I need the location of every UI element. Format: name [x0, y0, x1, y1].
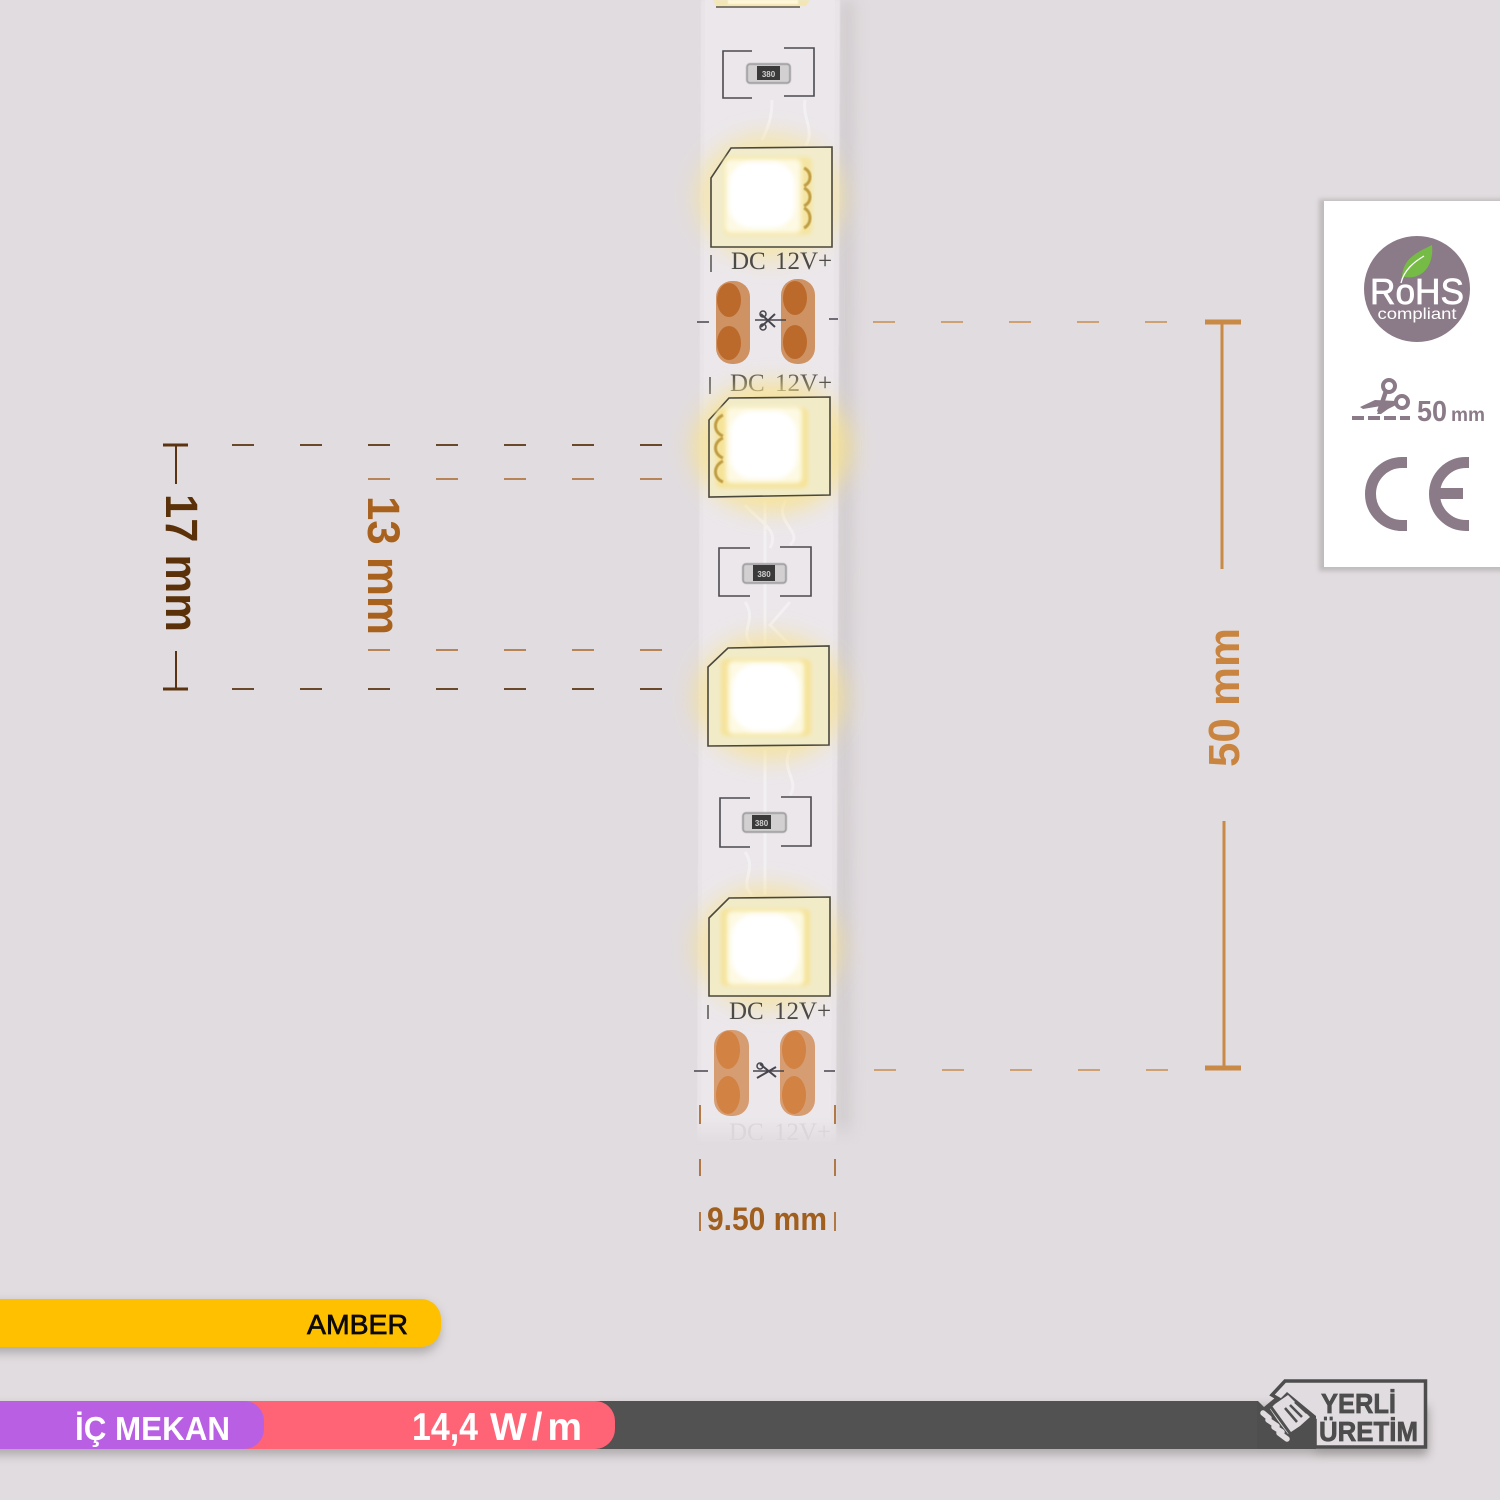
print label 3: DC	[729, 998, 764, 1025]
LED strip	[692, 0, 854, 1150]
resistor 3	[720, 797, 811, 847]
icon: CE mark	[1370, 462, 1469, 526]
print label 3	[708, 998, 831, 1025]
panel: certifications	[1319, 199, 1500, 571]
50 mm dimension	[873, 322, 1249, 1070]
amber colour bar: AMBER	[307, 1309, 408, 1340]
resistor 2	[719, 547, 811, 596]
strip shadow	[836, 0, 854, 1140]
amber colour bar	[0, 1299, 441, 1353]
print label 1: DC	[731, 248, 766, 275]
resistor 1	[723, 48, 814, 98]
wattage segment: W/m	[490, 1406, 582, 1449]
faded print label: DC	[729, 1119, 764, 1146]
print label 1: 12V+	[775, 248, 832, 275]
17 mm dimension	[156, 445, 662, 689]
print label 3: 12V+	[774, 998, 831, 1025]
resistor 1: 380	[762, 70, 776, 79]
LED 2	[692, 381, 852, 513]
faded print label: 12V+	[774, 1119, 831, 1146]
copper traces	[745, 100, 809, 895]
resistor 3: 380	[755, 819, 769, 828]
print label 1	[711, 248, 832, 275]
icon: RoHS compliant badge: compliant	[1378, 306, 1457, 323]
print label 2: DC	[730, 370, 765, 397]
badge: yerli uretim: YERLİ	[1321, 1388, 1396, 1419]
icon: handshake	[1257, 1392, 1316, 1449]
strip body	[697, 0, 840, 1150]
usage segment: İÇ MEKAN	[75, 1410, 230, 1447]
solder pads 1	[716, 279, 815, 364]
scissors mark 1	[697, 311, 838, 330]
label: 9.50 mm: 9.50 mm	[707, 1201, 827, 1237]
LED 1	[696, 133, 844, 261]
icon: cut every 50 mm: mm	[1451, 405, 1485, 426]
9.50 mm dimension	[700, 1105, 835, 1237]
LED 3	[694, 633, 846, 761]
badge: yerli uretim: ÜRETİM	[1319, 1416, 1418, 1447]
resistor 2: 380	[757, 570, 771, 579]
icon: RoHS compliant badge: RoHS	[1370, 271, 1464, 312]
print label 2: 12V+	[775, 370, 832, 397]
label: 50 mm: 50 mm	[1200, 628, 1249, 767]
badge: yerli uretim	[1257, 1381, 1427, 1453]
LED 0 remnant at top edge	[713, 0, 810, 7]
spec bar	[0, 1401, 1427, 1455]
wattage segment: 14,4	[412, 1406, 478, 1449]
LED 4	[694, 885, 842, 1009]
label: 17 mm: 17 mm	[156, 494, 207, 632]
label: 13 mm: 13 mm	[358, 496, 409, 635]
solder pads 2	[714, 1030, 815, 1116]
scissors mark 2	[694, 1063, 835, 1078]
icon: cut every 50 mm	[1352, 380, 1485, 428]
print label 2	[710, 370, 832, 397]
icon: RoHS compliant badge	[1364, 236, 1470, 342]
wattage segment	[200, 1401, 615, 1449]
dark bar	[0, 1401, 1258, 1449]
usage segment	[0, 1401, 264, 1449]
icon: cut every 50 mm: 50	[1417, 396, 1447, 428]
